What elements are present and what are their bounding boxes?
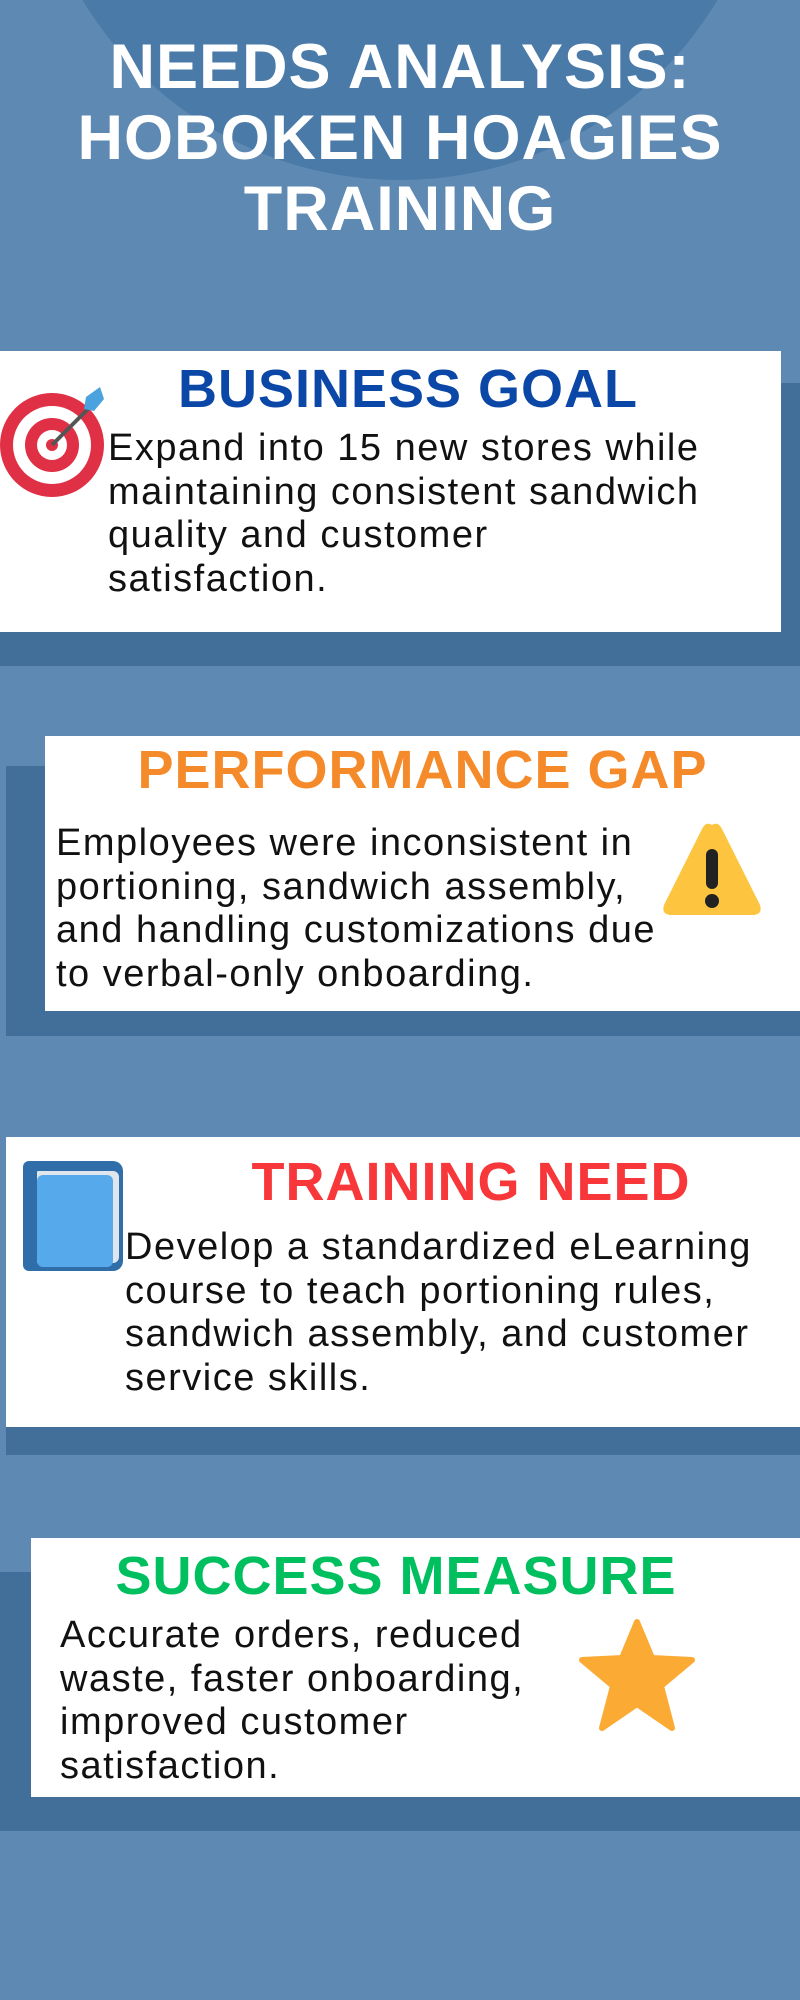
text: success measure: satisfaction.: [60, 1744, 280, 1786]
text: training need: Develop a standardized eLearning: [125, 1226, 752, 1268]
icon: target: [0, 387, 104, 497]
text: performance gap: [56, 822, 656, 994]
icon: warning: [663, 824, 761, 915]
text: performance gap: and handling customizations due: [56, 909, 656, 951]
title: NEEDS ANALYSIS:: [110, 32, 690, 102]
text: performance gap: to verbal-only onboarding.: [56, 952, 534, 994]
text: business goal: satisfaction.: [108, 558, 328, 600]
text: training need: sandwich assembly, and customer: [125, 1313, 750, 1355]
text: business goal: maintaining consistent sandwich: [108, 470, 699, 512]
panel: performance gap: [6, 736, 800, 1036]
heading: success measure: SUCCESS MEASURE: [115, 1546, 677, 1606]
panel: success measure: [0, 1538, 800, 1831]
panel: training need: [6, 1137, 800, 1455]
text: training need: [125, 1226, 752, 1398]
text: success measure: waste, faster onboarding,: [60, 1658, 524, 1700]
text: success measure: [60, 1614, 524, 1786]
text: performance gap: portioning, sandwich assembly,: [56, 866, 626, 908]
text: training need: service skills.: [125, 1356, 371, 1398]
text: success measure: improved customer: [60, 1701, 409, 1743]
heading: training need: TRAINING NEED: [251, 1152, 690, 1212]
text: training need: course to teach portioning rules,: [125, 1270, 715, 1312]
text: business goal: Expand into 15 new stores while: [108, 427, 700, 469]
text: business goal: [108, 427, 700, 600]
title: [77, 32, 723, 244]
heading: performance gap: PERFORMANCE GAP: [137, 740, 708, 800]
title: HOBOKEN HOAGIES: [77, 103, 723, 173]
text: business goal: quality and customer: [108, 514, 489, 556]
decorative circle behind title: [30, 0, 770, 180]
text: performance gap: Employees were inconsistent in: [56, 822, 633, 864]
icon: book: [23, 1161, 123, 1271]
panel: business goal: [0, 351, 800, 666]
icon: star: [579, 1619, 695, 1731]
heading: business goal: BUSINESS GOAL: [178, 359, 638, 419]
text: success measure: Accurate orders, reduced: [60, 1614, 523, 1656]
title: TRAINING: [244, 174, 556, 244]
